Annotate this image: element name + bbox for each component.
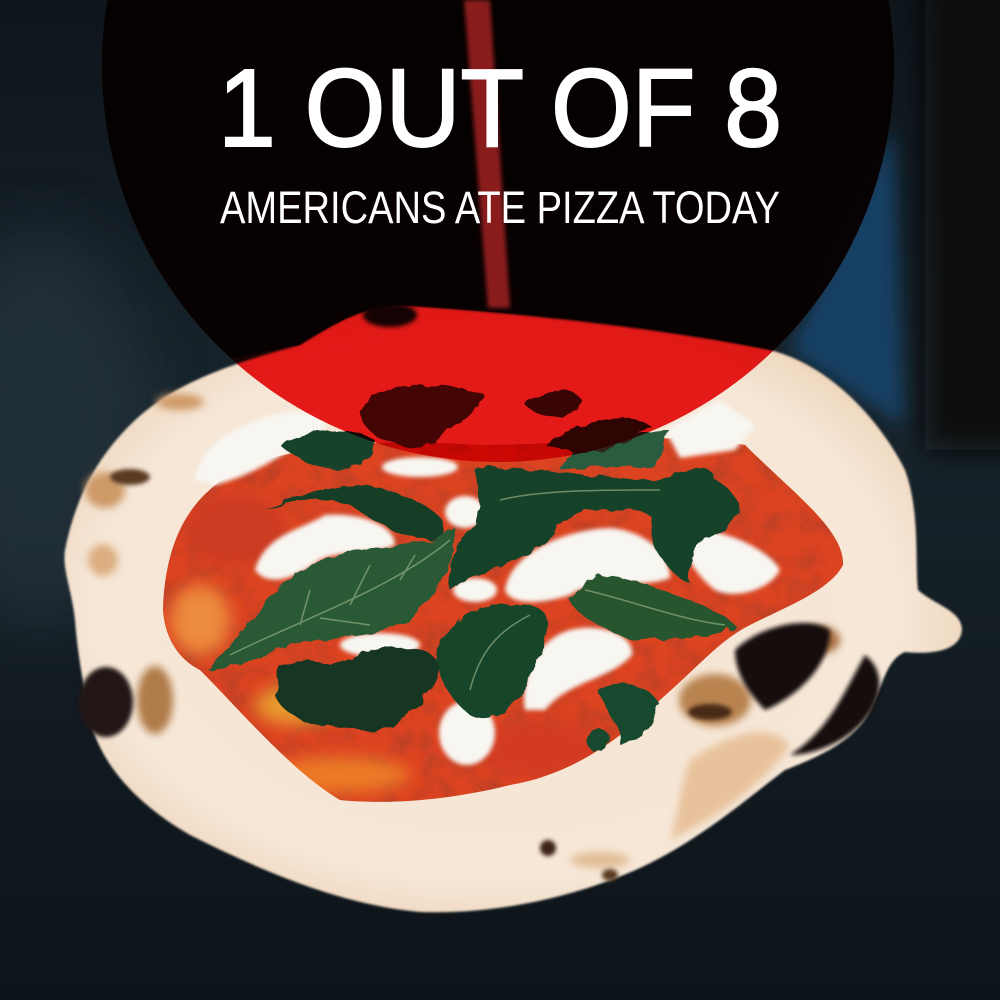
overlay: red circle multiplied over the photo (102, 0, 894, 462)
photo: pizza (64, 303, 962, 912)
subtitle: Americans ate pizza today: AMERICANS ATE PIZZA TODAY (220, 182, 780, 233)
toasted crust spots (85, 394, 840, 868)
pizza crust (64, 306, 962, 912)
leaf veins (230, 490, 725, 690)
charred crust spots (79, 303, 879, 881)
basil leaves (206, 384, 739, 753)
title: 1 out of 8: 1 OUT OF 8 (218, 47, 782, 170)
mozzarella (195, 400, 780, 765)
sauce (163, 438, 844, 802)
overlay: darkening of the circle above the pizza (90, 0, 910, 360)
